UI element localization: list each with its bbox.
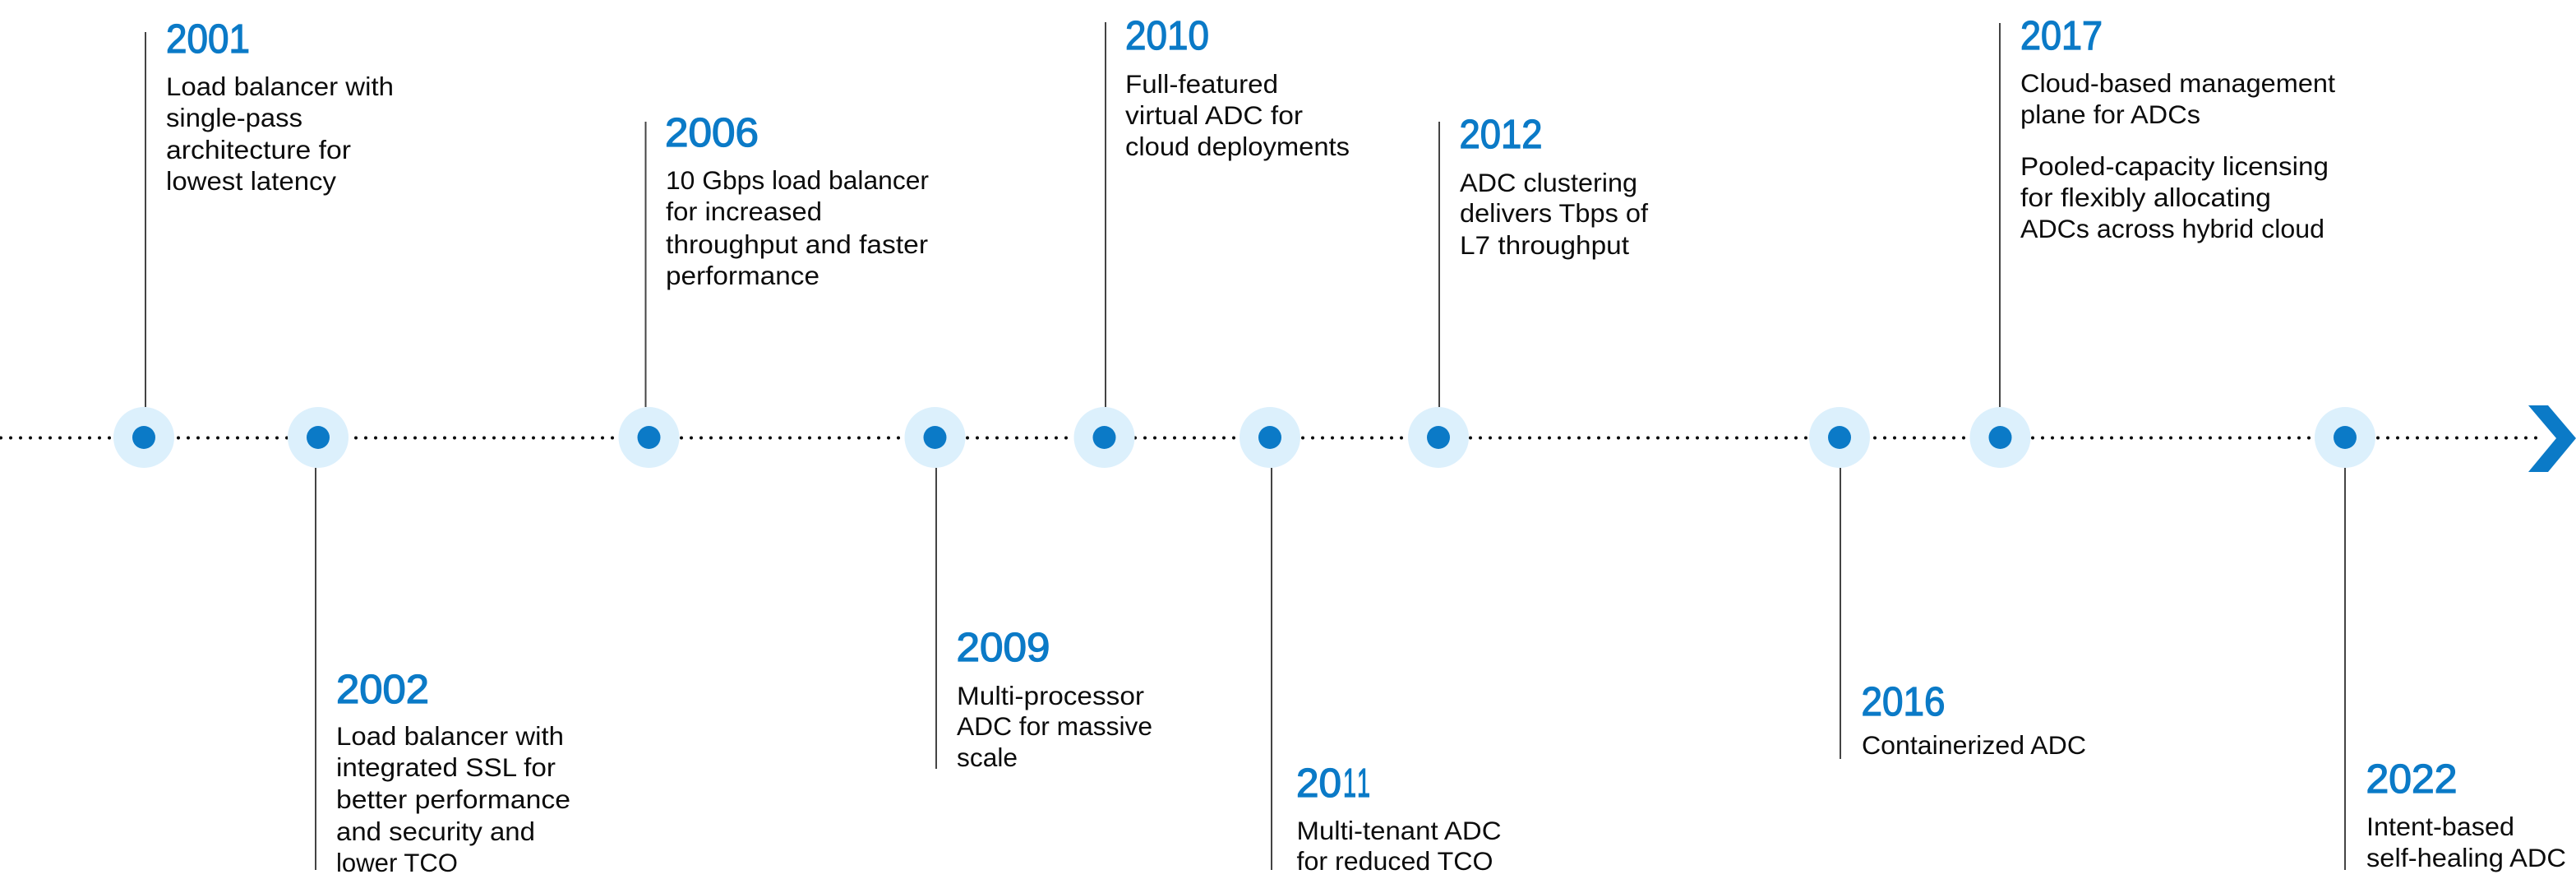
description 2016: Containerized ADC	[1862, 730, 2086, 760]
connector 2002	[315, 468, 316, 870]
marker 2011	[1240, 407, 1300, 468]
description 2012	[1460, 168, 1648, 260]
description 2009: scale	[957, 743, 1018, 772]
marker 2016	[1809, 407, 1870, 468]
description 2011	[1297, 816, 1501, 876]
description 2006	[666, 165, 929, 290]
description 2017: Pooled-capacity licensing	[2020, 151, 2329, 181]
description 2010: virtual ADC for	[1125, 100, 1303, 130]
year 2011	[1296, 761, 1370, 806]
timeline axis: dotted line	[1, 436, 2537, 439]
milestone 2016	[1809, 407, 2086, 760]
year 2010: 2010	[1125, 14, 1209, 58]
marker 2012	[1408, 407, 1469, 468]
milestone 2011	[1240, 407, 1501, 876]
connector 2010	[1105, 22, 1106, 407]
description 2002: Load balancer with	[336, 721, 564, 751]
year 2016: 2016	[1861, 680, 1945, 724]
description 2002: and security and	[336, 817, 535, 846]
description 2001: architecture for	[166, 135, 351, 164]
marker 2009	[904, 407, 965, 468]
description 2006: performance	[666, 261, 819, 290]
milestone 2010	[1073, 14, 1350, 468]
description 2009: Multi-processor	[957, 681, 1144, 710]
description 2017: for flexibly allocating	[2020, 183, 2271, 212]
description 2009: ADC for massive	[957, 711, 1152, 741]
year 2022: 2022	[2366, 757, 2458, 802]
description 2010	[1125, 69, 1350, 161]
description 2012: delivers Tbps of	[1460, 198, 1648, 228]
year 2012: 2012	[1460, 113, 1542, 157]
marker 2010	[1073, 407, 1134, 468]
connector 2009	[935, 468, 937, 769]
description 2011: Multi-tenant ADC	[1297, 816, 1501, 845]
description 2002: lower TCO	[336, 848, 458, 877]
description 2017: Cloud-based management	[2020, 68, 2335, 98]
milestone 2002	[288, 407, 570, 877]
marker 2002	[288, 407, 349, 468]
description 2002: integrated SSL for	[336, 752, 556, 782]
year 2017: 2017	[2020, 14, 2103, 58]
year 2001: 2001	[166, 17, 250, 62]
connector 2001	[145, 32, 146, 407]
description 2001: single-pass	[166, 103, 302, 132]
milestone 2012	[1408, 113, 1648, 468]
description 2009	[957, 681, 1152, 772]
year 2011: 1	[1357, 761, 1370, 806]
year 2011: 1	[1343, 761, 1356, 806]
connector 2022	[2344, 468, 2346, 870]
description 2011: for reduced TCO	[1297, 846, 1493, 876]
connector 2011	[1271, 468, 1272, 870]
description 2022: Intent-based	[2366, 812, 2514, 841]
arrow head	[2528, 405, 2576, 472]
description 2002	[336, 721, 570, 877]
description 2022	[2366, 812, 2566, 872]
description 2006: throughput and faster	[666, 229, 928, 259]
milestone 2006	[618, 111, 929, 468]
year 2006: 2006	[665, 111, 759, 155]
description 2012: ADC clustering	[1460, 168, 1637, 197]
description 2022: self-healing ADC	[2366, 843, 2566, 872]
connector 2012	[1438, 122, 1440, 407]
milestone 2017	[1969, 14, 2335, 468]
milestone 2001	[113, 17, 394, 468]
description 2006: for increased	[666, 197, 822, 226]
description 2002: better performance	[336, 784, 570, 814]
description 2006: 10 Gbps load balancer	[666, 165, 929, 195]
year 2009: 2009	[957, 626, 1050, 670]
description 2017: ADCs across hybrid cloud	[2020, 214, 2324, 243]
connector 2017	[1999, 23, 2001, 407]
description 2001: lowest latency	[166, 166, 336, 196]
description 2010: Full-featured	[1125, 69, 1278, 99]
year 2011: 20	[1296, 761, 1341, 806]
description 2017: plane for ADCs	[2020, 99, 2200, 129]
marker 2022	[2315, 407, 2375, 468]
connector 2006	[644, 122, 646, 407]
description 2017	[2020, 68, 2335, 243]
connector 2016	[1840, 468, 1841, 759]
milestone 2022	[2315, 407, 2566, 872]
year 2002: 2002	[336, 668, 429, 712]
description 2001: Load balancer with	[166, 72, 394, 101]
milestone 2009	[904, 407, 1152, 772]
description 2001	[166, 72, 394, 196]
description 2012: L7 throughput	[1460, 230, 1629, 260]
marker 2006	[618, 407, 679, 468]
marker 2001	[113, 407, 174, 468]
marker 2017	[1969, 407, 2030, 468]
description 2010: cloud deployments	[1125, 132, 1350, 161]
